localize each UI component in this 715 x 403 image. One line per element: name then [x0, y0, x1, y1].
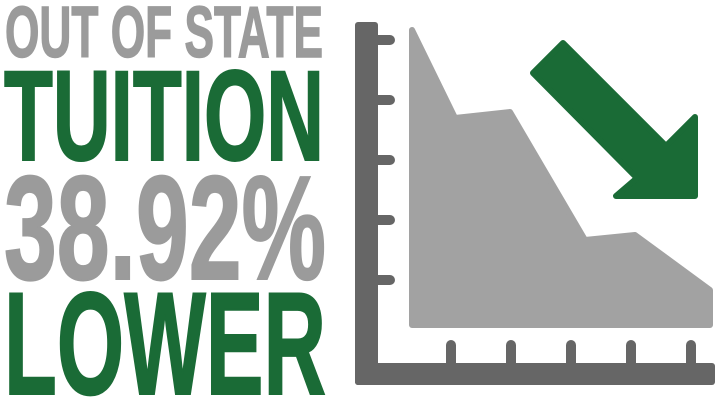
heading: tuition: TUITION — [4, 45, 324, 188]
axes — [355, 22, 715, 385]
icon: down arrow — [533, 43, 695, 196]
area — [412, 30, 710, 325]
chart: declining area — [355, 22, 715, 385]
stat: 38.92%: 38.92% — [4, 146, 326, 311]
